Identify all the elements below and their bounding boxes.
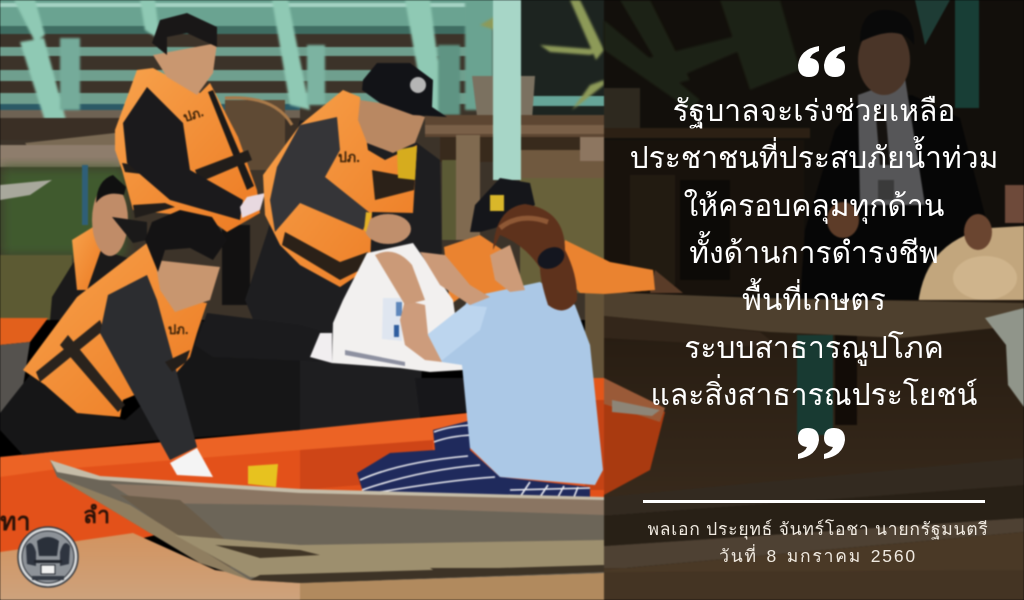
background: house and water — [0, 0, 604, 383]
white pillar — [493, 0, 521, 180]
left officer leaning: ปภ. — [168, 322, 188, 337]
quote text: พื้นที่เกษตร — [742, 284, 886, 317]
shirt — [427, 282, 603, 485]
quote text: ทั้งด้านการดำรงชีพ — [689, 237, 939, 270]
seated man — [800, 95, 990, 300]
far end of orange boat — [604, 378, 665, 495]
lower deck and water — [425, 115, 604, 137]
arms — [400, 300, 442, 362]
divider line — [643, 500, 985, 503]
quote text — [630, 95, 998, 412]
orange rescue boat — [0, 318, 604, 600]
right of pillar: dark house, plants — [521, 0, 604, 118]
pot — [472, 76, 535, 124]
green pillars — [14, 0, 493, 137]
quote text: ให้ครอบคลุมทุกด้าน — [684, 190, 944, 223]
hands and hat — [827, 202, 859, 238]
relief bag — [332, 243, 463, 372]
man with elbow, far left — [50, 175, 147, 320]
left officer leaning — [0, 210, 335, 477]
quote text: ระบบสาธารณูปโภค — [684, 332, 944, 365]
quote text: รัฐบาลจะเร่งช่วยเหลือ — [673, 95, 955, 128]
right side: darkened photo with seated man — [604, 0, 1024, 600]
wooden boat foreground — [50, 460, 604, 583]
seal emblem — [18, 527, 78, 587]
officer at back: ปภ. — [181, 104, 205, 125]
date: วันที่ 8 มกราคม 2560 — [719, 546, 917, 566]
rag — [985, 308, 1024, 407]
quote text: และสิ่งสาธารณประโยชน์ — [651, 379, 977, 412]
quote mark open — [798, 46, 845, 77]
quote text: ประชาชนที่ประสบภัยน้ำท่วม — [630, 142, 998, 175]
officer at back — [115, 13, 265, 305]
knee of man behind — [415, 378, 468, 417]
teal pillars — [915, 0, 950, 45]
attribution: พลเอก ประยุทธ์ จันทร์โอชา นายกรัฐมนตรี — [647, 519, 989, 539]
man with black cap — [444, 178, 655, 305]
wood deck and shore — [0, 118, 300, 140]
sleeve and plank — [604, 262, 655, 294]
general: body — [245, 63, 447, 430]
water — [604, 300, 1024, 500]
orange rescue boat: ลำ — [83, 502, 110, 528]
quote mark close — [798, 428, 845, 459]
head and hair — [490, 245, 525, 292]
far boat hull — [604, 458, 1024, 516]
general: body: ปภ. — [338, 149, 360, 165]
orange rescue boat: ทา — [0, 508, 31, 536]
woman in blue shirt — [357, 204, 603, 497]
